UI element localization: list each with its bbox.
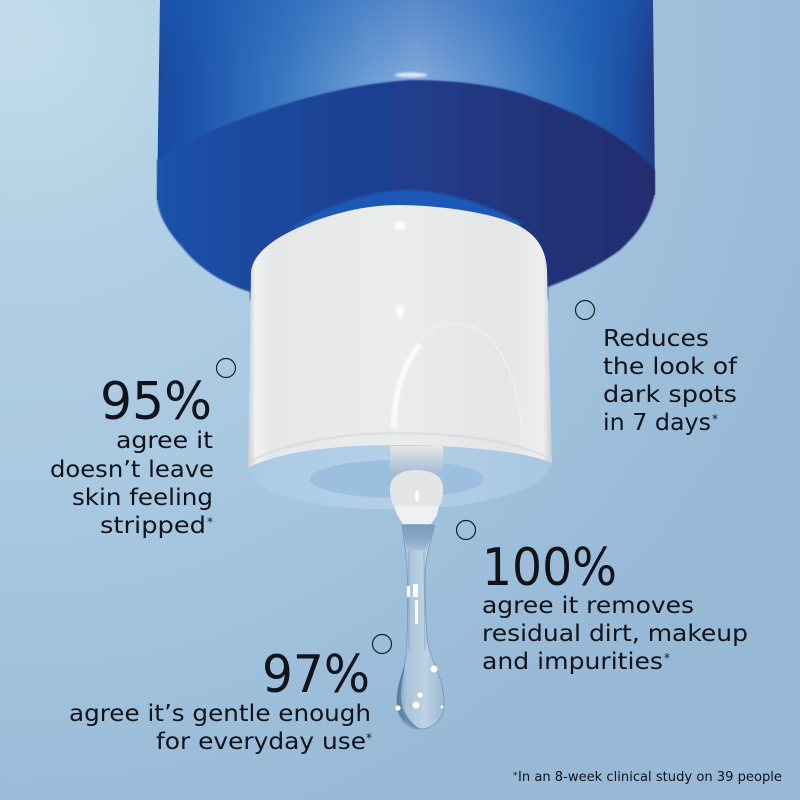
drop rim shade (397, 665, 420, 729)
cap highlights (394, 221, 406, 318)
stat description 100%: residual dirt, makeup (482, 619, 748, 647)
marker: 95% (216, 358, 236, 378)
stat description 95%: agree it (116, 426, 213, 454)
drop highlights (395, 584, 444, 711)
stat description 100%: * (664, 651, 670, 665)
drop neck and bulb (397, 525, 444, 729)
highlight on shoulder (395, 72, 427, 78)
stat description 95%: doesn’t leave (50, 455, 214, 483)
stat: dark spots: Reduces (603, 324, 709, 352)
stat: dark spots: * (712, 412, 718, 426)
stat description 100%: agree it removes (482, 591, 694, 619)
stat description 97%: agree it’s gentle enough (69, 699, 371, 727)
stat: 100% (482, 538, 748, 675)
drop inner streak (409, 550, 425, 650)
stat: 95% (50, 372, 214, 539)
liquid drop (395, 525, 444, 729)
nozzle shadow (390, 446, 443, 474)
cap inner circle (310, 460, 484, 498)
cap body (248, 205, 552, 468)
stat: dark spots: the look of (603, 352, 738, 380)
stat: 97% (69, 645, 372, 755)
cap (248, 205, 552, 524)
stat description 97% (69, 699, 372, 755)
footnote: * (513, 771, 518, 781)
stat description 95%: * (207, 515, 213, 529)
nozzle (390, 470, 443, 507)
nozzle tip (394, 506, 439, 524)
bottle top shading (160, 0, 653, 80)
marker: dark spots (576, 300, 594, 320)
stat description 97%: * (366, 731, 372, 745)
cap lower rim line (250, 433, 551, 462)
bottle dark lower band (157, 80, 655, 300)
arch highlight (394, 345, 420, 428)
stat: dark spots: dark spots (603, 380, 737, 408)
stat description 95% (50, 426, 214, 539)
stat description 100%: and impurities (482, 647, 663, 675)
marker: 97% (372, 634, 392, 654)
stat description 95%: skin feeling (72, 483, 213, 511)
embossed arch (391, 323, 522, 437)
footnote: In an 8-week clinical study on 39 people (518, 769, 782, 785)
stat: dark spots: in 7 days (603, 408, 711, 436)
stat: dark spots (603, 324, 738, 436)
drop neck shading (402, 525, 435, 550)
stat number 95%: 95% (100, 372, 212, 432)
marker circles (216, 300, 594, 654)
marker: 100% (456, 520, 476, 540)
bottle upper body (157, 0, 655, 200)
stat number 100%: 100% (482, 538, 617, 598)
stat description 97%: for everyday use (156, 727, 366, 755)
stat description 95%: stripped (100, 511, 206, 539)
blue collar ring (293, 190, 522, 240)
stat description 100% (482, 591, 748, 675)
cap underside (248, 440, 552, 509)
bottle (157, 0, 655, 300)
nozzle highlight (415, 490, 419, 502)
stat number 97%: 97% (262, 645, 370, 705)
